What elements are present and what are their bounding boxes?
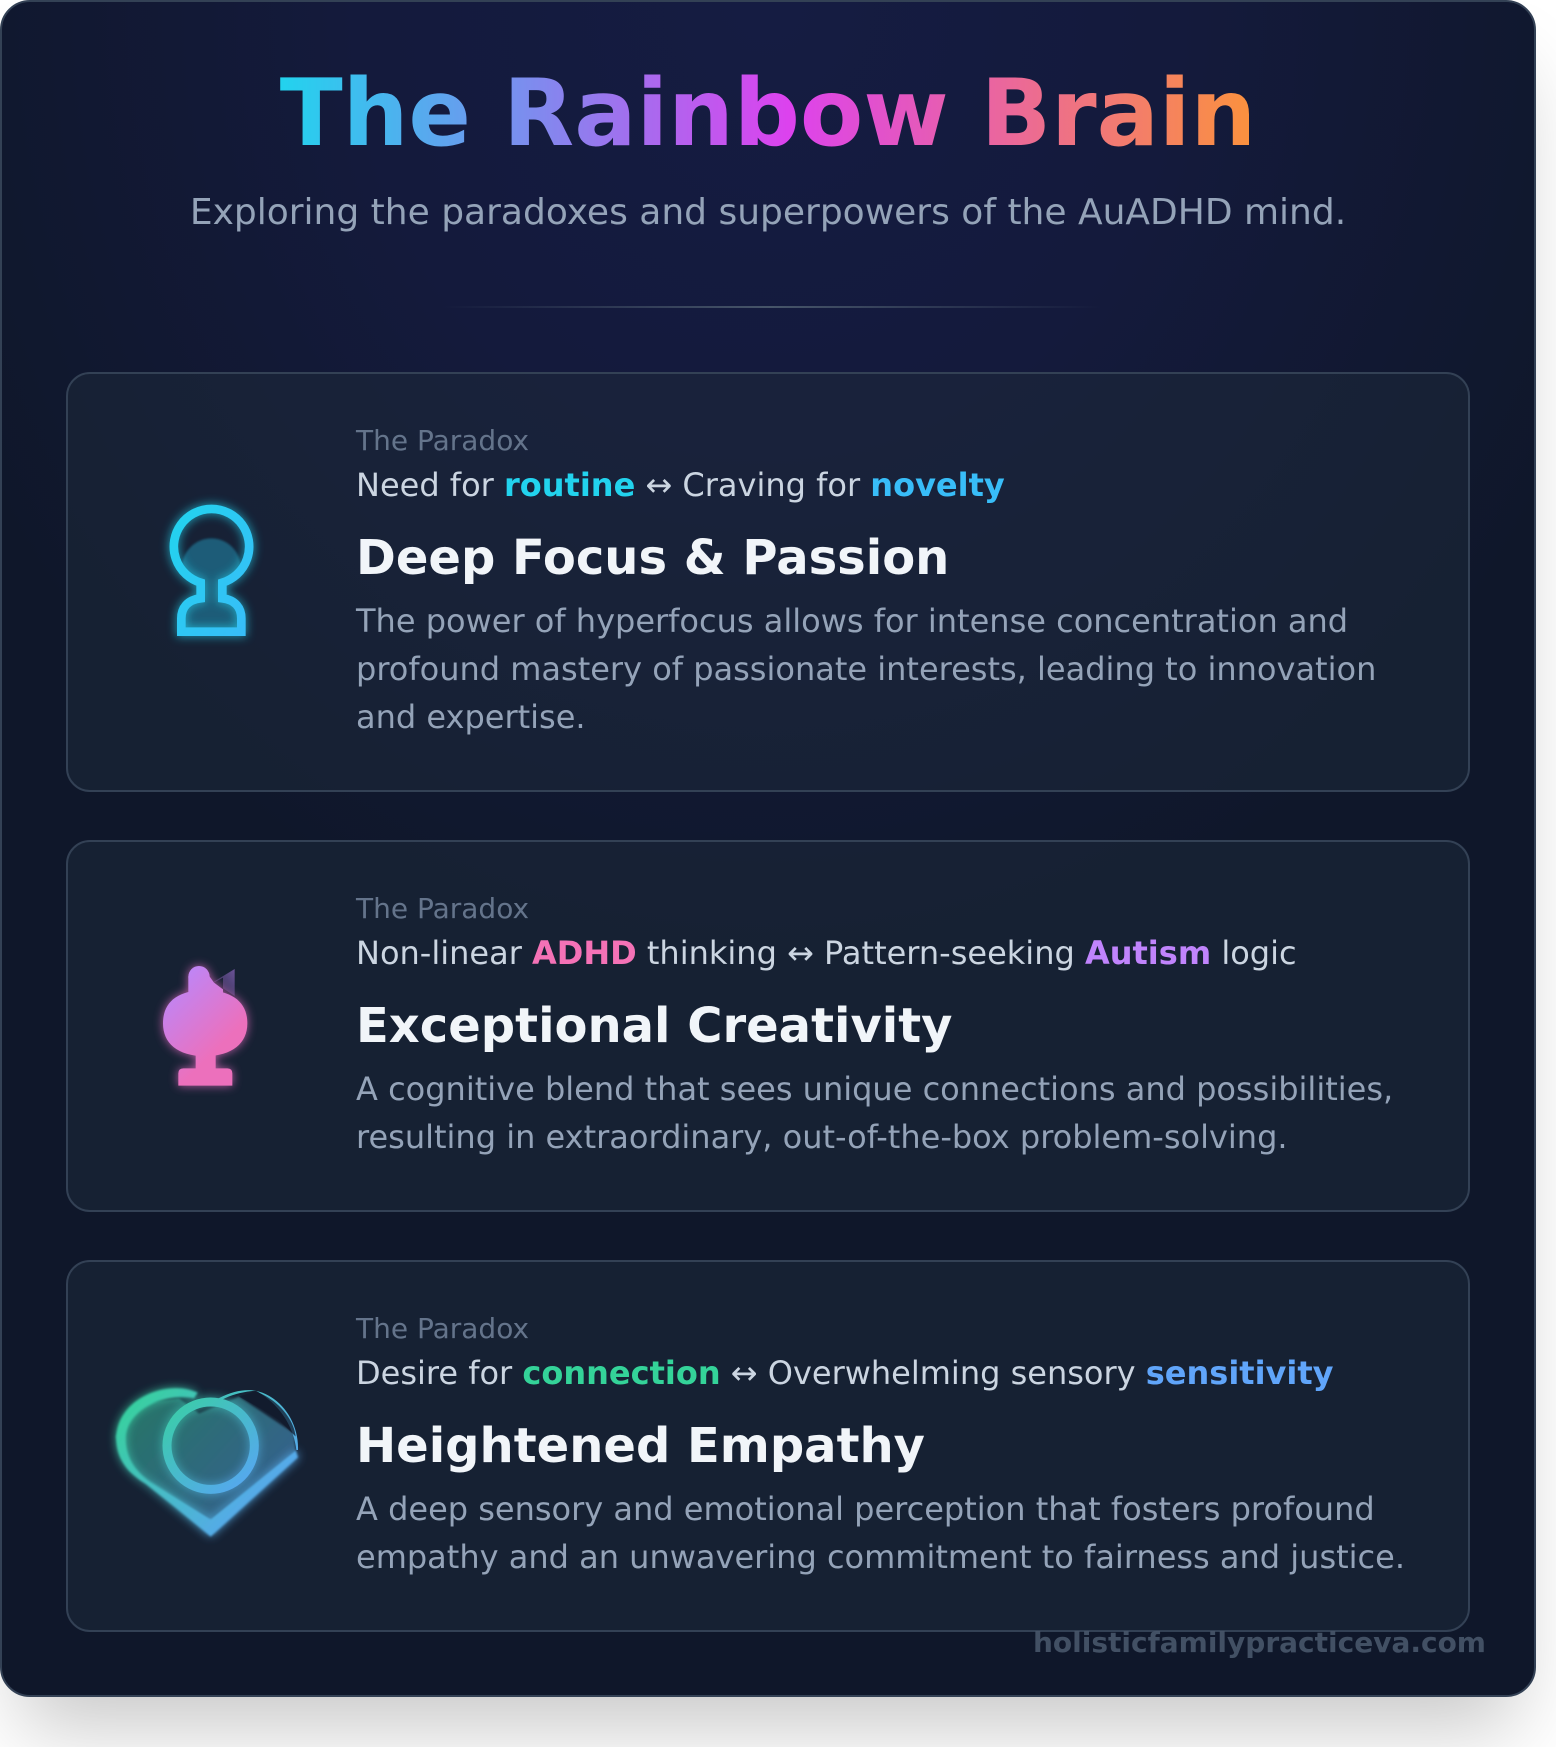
paradox statement: Non-linear ADHD thinking ↔ Pattern-seeking Autism logic: [356, 934, 1297, 972]
card description: [356, 602, 1376, 736]
icon: heart with ring: [110, 1382, 304, 1542]
card description: profound mastery of passionate interests, leading to innovation: [356, 650, 1376, 688]
card heading: Exceptional Creativity: [356, 998, 952, 1054]
card heading: Heightened Empathy: [356, 1418, 925, 1474]
paradox statement: Need for routine ↔ Craving for novelty: [356, 466, 1005, 504]
title: The Rainbow Brain: [280, 59, 1256, 167]
paradox label: The Paradox: [356, 1312, 529, 1345]
panel: creativity card: [66, 840, 1470, 1212]
card heading: Deep Focus & Passion: [356, 530, 949, 586]
card description: and expertise.: [356, 698, 586, 736]
watermark: holisticfamilypracticeva.com: [1033, 1626, 1486, 1659]
paradox label: The Paradox: [356, 892, 529, 925]
panel: empathy card: [66, 1260, 1470, 1632]
card description: A deep sensory and emotional perception that fosters profound: [356, 1490, 1375, 1528]
paradox statement: Desire for connection ↔ Overwhelming sensory sensitivity: [356, 1354, 1334, 1392]
panel: deep focus card: [66, 372, 1470, 792]
icon: focus keyhole figure: [162, 498, 260, 644]
card description: [356, 1070, 1393, 1156]
paradox label: The Paradox: [356, 424, 529, 457]
card description: empathy and an unwavering commitment to fairness and justice.: [356, 1538, 1405, 1576]
card description: resulting in extraordinary, out-of-the-box problem-solving.: [356, 1118, 1288, 1156]
card description: A cognitive blend that sees unique connections and possibilities,: [356, 1070, 1393, 1108]
card description: The power of hyperfocus allows for intense concentration and: [356, 602, 1348, 640]
icon: creativity bulb: [156, 960, 254, 1093]
subtitle: Exploring the paradoxes and superpowers of the AuADHD mind.: [190, 192, 1346, 233]
card description: [356, 1490, 1405, 1576]
